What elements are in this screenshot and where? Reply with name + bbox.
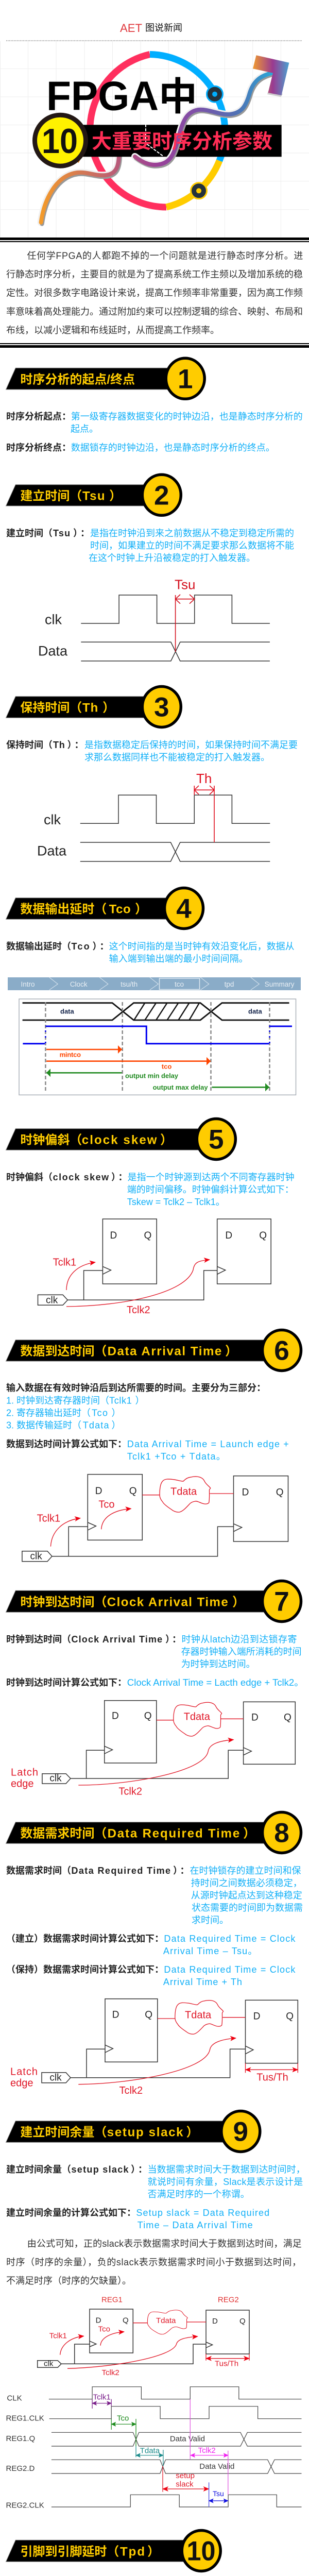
Tdata marker <box>136 2446 163 2466</box>
section 9 text: 当数据需求时间大于数据到达时间时， <box>148 2164 305 2175</box>
setup slack timing chart: REG2.D <box>6 2464 35 2473</box>
section 5 text: 时钟偏斜（ <box>6 1172 53 1182</box>
Tclk2 marker <box>190 2399 228 2495</box>
setup slack circuit: clk <box>44 2360 54 2368</box>
section 5 header: ） <box>160 1133 173 1147</box>
section 10 header: 引脚到引脚延时（ <box>20 2545 119 2558</box>
section 4 text <box>6 941 295 964</box>
section 9 header: setup slack <box>107 2126 184 2139</box>
section 8 text: Arrival Time – Tsu。 <box>163 1946 257 1956</box>
section 6 text: 1. 时钟到达寄存器时间（ <box>6 1395 109 1405</box>
section 6 header: 6 <box>274 1335 289 1366</box>
section 3 header: 保持时间（ <box>20 701 82 715</box>
section 7 header <box>6 1581 301 1622</box>
section 7 text <box>6 1634 304 1688</box>
section 9 text: Time – Data Arrival Time <box>138 2220 253 2230</box>
section 7 text: 为时钟到达时间。 <box>181 1659 255 1669</box>
section 8 text: 求时间。 <box>192 1915 229 1925</box>
intro panel <box>0 238 309 348</box>
section 9 text: ： <box>138 2164 147 2175</box>
section 1 text <box>6 411 303 453</box>
intro panel: 行静态时序分析，主要目的就是为了提高系统工作主频以及增加系统的稳 <box>6 269 303 279</box>
section 9 header: ） <box>186 2126 199 2139</box>
data required circuit: Latch <box>10 2066 38 2077</box>
hold time waveform: Data <box>37 843 67 859</box>
section 10 header: 10 <box>186 2536 215 2566</box>
section 4 text: ： <box>100 941 109 952</box>
intro panel: 率意味着高处理能力。通过附加约束可以控制逻辑的综合、映射、布局和 <box>6 307 303 317</box>
section 9 header <box>6 2111 260 2151</box>
main title: FPGA <box>46 73 159 118</box>
section 4 text: 数据输出延时（ <box>6 941 71 952</box>
section 5 header: clock skew <box>82 1133 158 1147</box>
data required circuit: Tus/Th <box>256 2072 288 2083</box>
clock skew circuit: D <box>225 1230 232 1241</box>
section 6 text: Data Arrival Time = Launch edge + <box>127 1439 289 1449</box>
section 7 header: 时钟到达时间（ <box>20 1595 107 1609</box>
tco nav strip: Intro <box>21 980 35 988</box>
section 3 text: 求那么数据同样也不能被稳定的打入触发器。 <box>84 752 270 762</box>
section 3 text: 保持时间（ <box>6 740 53 750</box>
section 8 text: （建立）数据需求时间计算公式如下： <box>6 1933 164 1944</box>
data required circuit: Tdata <box>185 2010 212 2021</box>
data required circuit: clk <box>49 2072 62 2083</box>
clock skew circuit: D <box>110 1230 117 1241</box>
section 8 text: 数据需求时间（ <box>6 1866 71 1876</box>
section 6 text: Tdata <box>83 1420 110 1430</box>
tco nav strip: tco <box>175 980 184 988</box>
section 2 text: 时间，如果建立的时间不满足要求那么数据将不能 <box>90 540 294 551</box>
setup slack circuit: REG1 <box>101 2295 123 2304</box>
setup slack circuit: Tdata <box>156 2316 176 2325</box>
rising curve, lower part <box>41 149 120 224</box>
section 6 text: ） <box>111 1420 121 1430</box>
section 10 header <box>6 2531 220 2571</box>
section 6 text <box>6 1382 289 1462</box>
section 9 text: 就说时间有余量，Slack是表示设计是 <box>148 2177 303 2187</box>
section 6 text: 输入数据在有效时钟沿后到达所需要的时间。主要分为三部分： <box>6 1382 266 1393</box>
data arrival circuit: clk <box>30 1551 42 1562</box>
section 2 text: 在这个时钟上升沿被稳定的打入触发器。 <box>89 553 255 563</box>
section 7 header: 7 <box>274 1587 289 1617</box>
setup time waveform: clk <box>45 612 62 628</box>
clock skew circuit: Q <box>144 1230 151 1241</box>
Tco marker <box>111 2414 136 2446</box>
setup slack marker: slack <box>176 2480 194 2489</box>
section 7 header: Clock Arrival Time <box>107 1595 229 1609</box>
hold time waveform <box>37 771 270 861</box>
main title: 中 <box>159 75 197 118</box>
section 4 text: 这个时间指的是当时钟有效沿变化后，数据从 <box>109 941 295 952</box>
section 9 text: 由公式可知，正的slack表示数据需求时间大于数据到达时间，满足 <box>27 2239 302 2249</box>
data required circuit: D <box>112 2010 119 2021</box>
section 2 header: Tsu <box>82 489 106 503</box>
section 4 header: ） <box>135 903 147 916</box>
arrow head <box>253 55 289 97</box>
setup slack circuit: Tclk2 <box>102 2368 119 2377</box>
clock arrival circuit: Q <box>284 1712 291 1723</box>
hold time waveform: Th <box>196 771 212 786</box>
section 8 text: Arrival Time + Th <box>163 1977 242 1987</box>
brand header: AET <box>120 22 142 35</box>
setup slack circuit: D <box>212 2317 218 2326</box>
section 6 header: 数据到达时间（ <box>20 1345 107 1358</box>
section 4 text: ） <box>93 941 102 952</box>
section 8 text: Data Required Time <box>71 1866 171 1876</box>
section 5 header: 5 <box>209 1124 224 1155</box>
section 2 text: ） <box>73 528 82 538</box>
tco timing chart: tco <box>162 1062 171 1070</box>
section 2 text: ： <box>80 528 90 538</box>
section 8 text: ） <box>173 1866 182 1876</box>
section 7 text: ） <box>165 1634 175 1645</box>
section 8 text <box>6 1866 303 1987</box>
tco timing chart: mintco <box>60 1051 81 1059</box>
tco timing chart: output max delay <box>153 1083 208 1091</box>
setup slack circuit: REG2 <box>218 2295 239 2304</box>
clock arrival circuit <box>11 1701 295 1797</box>
section 2 header: 2 <box>154 480 169 511</box>
ring graphic <box>90 55 225 207</box>
section 6 text: ） <box>135 1395 144 1405</box>
section 6 text: 数据到达时间计算公式如下： <box>6 1438 127 1449</box>
setup slack timing chart: REG1.Q <box>6 2434 35 2443</box>
tco timing chart: output min delay <box>125 1072 179 1079</box>
setup time waveform: Tsu <box>175 577 195 592</box>
section 7 text: 时钟从latch边沿到达锁存寄 <box>181 1634 297 1645</box>
section 2 text: Tsu <box>53 528 71 538</box>
setup slack circuit: Q <box>239 2317 246 2326</box>
setup slack timing chart: Data Valid <box>170 2435 205 2444</box>
section 5 text: clock skew <box>53 1172 110 1182</box>
section 8 text: （保持）数据需求时间计算公式如下： <box>6 1964 164 1975</box>
hold time waveform: clk <box>44 812 61 827</box>
setup slack timing chart: Data Valid <box>199 2462 234 2471</box>
section 8 header: 数据需求时间（ <box>20 1827 107 1840</box>
section 3 text: ： <box>74 740 83 750</box>
clock arrival circuit: clk <box>49 1773 62 1784</box>
tco nav strip <box>8 977 301 990</box>
section 8 text: Data Required Time = Clock <box>164 1934 296 1944</box>
data arrival circuit: D <box>95 1486 102 1497</box>
section 1 header <box>6 358 204 399</box>
setup slack circuit: Q <box>123 2316 129 2325</box>
section 4 text: Tco <box>71 941 91 952</box>
setup time waveform: Data <box>38 643 68 659</box>
section 5 text: ） <box>111 1172 121 1182</box>
section 6 header: Data Arrival Time <box>108 1345 222 1358</box>
badge 10: 10 <box>42 122 78 161</box>
section 9 text <box>6 2164 305 2286</box>
Tco marker: Tco <box>117 2414 129 2423</box>
section 9 text: Setup slack = Data Required <box>136 2208 269 2218</box>
tco nav strip: Clock <box>70 980 88 988</box>
section 8 text: 在时钟锁存的建立时间和保 <box>190 1866 301 1876</box>
Tsu marker <box>209 2482 228 2507</box>
data required circuit <box>10 1999 298 2096</box>
section 9 text: 不满足时序（时序的欠缺量）。 <box>6 2276 131 2286</box>
data required circuit: D <box>253 2011 261 2022</box>
section 6 text: 3. 数据传输延时（ <box>6 1420 81 1430</box>
hero title graphic <box>0 41 309 238</box>
setup slack circuit: Tus/Th <box>215 2360 238 2368</box>
section 7 text: Clock Arrival Time = Lacth edge + Tclk2。 <box>127 1677 304 1688</box>
setup slack circuit: Tclk1 <box>49 2331 67 2340</box>
section 3 text: ） <box>67 740 76 750</box>
section 8 header <box>6 1812 301 1853</box>
data arrival circuit: Tco <box>98 1499 115 1511</box>
section 4 header: 4 <box>176 893 192 924</box>
subtitle: 大重要时序分析参数 <box>92 131 272 153</box>
section 1 text: 时序分析起点： <box>6 411 71 421</box>
setup slack circuit: Tco <box>98 2325 110 2334</box>
tco timing chart <box>19 999 296 1095</box>
section 7 text: 存器时钟输入端所消耗的时间 <box>181 1647 302 1657</box>
clock skew circuit <box>38 1219 271 1316</box>
clock skew circuit: Q <box>259 1230 267 1241</box>
section 1 text: 第一级寄存器数据变化的时钟边沿，也是静态时序分析的 <box>71 411 303 421</box>
setup slack marker: setup <box>176 2471 195 2480</box>
tco nav strip: Summary <box>265 980 295 988</box>
section 7 text: 时钟到达时间计算公式如下： <box>6 1677 127 1688</box>
section 6 text: ） <box>111 1408 121 1418</box>
section 8 text: Data Required Time = Clock <box>164 1964 296 1975</box>
clock skew circuit: Tclk2 <box>127 1304 150 1316</box>
section 5 text: Tskew = Tclk2 – Tclk1。 <box>127 1197 225 1207</box>
section 10 header: Tpd <box>120 2545 146 2558</box>
data required circuit: edge <box>10 2077 33 2089</box>
setup slack circuit <box>38 2295 249 2377</box>
section 1 text: 数据锁存的时钟边沿，也是静态时序分析的终点。 <box>71 443 275 453</box>
section 8 header: 8 <box>274 1818 289 1849</box>
section 3 text: 是指数据稳定后保持的时间，如果保持时间不满足要 <box>84 740 298 750</box>
section 3 text <box>6 740 298 762</box>
clock arrival circuit: Tclk2 <box>118 1786 142 1797</box>
section 1 text: 起点。 <box>71 423 98 434</box>
section 6 text: Tclk1 <box>109 1395 132 1405</box>
section 6 text: Tco <box>92 1408 109 1418</box>
section 4 header: 数据输出延时（ <box>20 903 107 916</box>
tco timing chart: data <box>60 1008 74 1015</box>
section 6 header: ） <box>225 1345 237 1358</box>
section 3 header: 3 <box>154 692 169 722</box>
tco nav strip: tsu/th <box>121 980 138 988</box>
section 7 text: 时钟到达时间（ <box>6 1634 71 1645</box>
section 1 header: 1 <box>178 364 193 394</box>
data required circuit: Q <box>145 2010 152 2021</box>
clock arrival circuit: D <box>251 1712 259 1723</box>
setup time waveform <box>38 577 270 661</box>
data arrival circuit: Q <box>129 1486 136 1497</box>
data arrival circuit: Q <box>276 1487 284 1498</box>
section 8 text: 状态需要的时间即为数据需 <box>192 1903 303 1913</box>
section 2 text <box>6 528 294 563</box>
section 5 text: 端的时间偏移。时钟偏斜计算公式如下： <box>127 1184 294 1195</box>
section 5 text: ： <box>118 1172 128 1182</box>
section 1 header: 时序分析的起点/终点 <box>20 373 135 386</box>
clock arrival circuit: Tdata <box>184 1711 211 1722</box>
section 4 text: 输入端到输出端的最小时间间隔。 <box>109 954 248 964</box>
section 2 header <box>6 474 181 515</box>
section 9 text: 建立时间余量（ <box>6 2164 71 2175</box>
section 7 text: ： <box>172 1634 181 1645</box>
setup slack timing chart <box>6 2387 302 2510</box>
clock arrival circuit: Q <box>144 1711 151 1722</box>
section 7 text: Clock Arrival Time <box>71 1634 163 1645</box>
section 8 text: ： <box>180 1866 190 1876</box>
section 9 header: 9 <box>233 2116 248 2147</box>
section 5 text <box>6 1172 295 1207</box>
section 9 text: 建立时间余量的计算公式如下： <box>6 2207 136 2218</box>
clock arrival circuit: edge <box>11 1778 34 1789</box>
section 9 text: 否满足时序的一个称谓。 <box>148 2189 250 2199</box>
setup slack timing chart: CLK <box>7 2394 22 2402</box>
section 6 text: 2. 寄存器输出延时（ <box>6 1408 91 1418</box>
intro panel: 布线，以减小逻辑和布线延时，从而提高工作频率。 <box>6 325 219 335</box>
Tsu marker: Tsu <box>213 2489 224 2498</box>
section 2 header: 建立时间（ <box>20 489 82 503</box>
section 8 text: 从源时钟起点达到这种稳定 <box>191 1890 302 1901</box>
Tdata marker: Tdata <box>140 2446 160 2455</box>
setup slack timing chart: REG2.CLK <box>6 2501 44 2510</box>
setup slack circuit: D <box>96 2316 101 2325</box>
Tclk1 marker <box>92 2393 111 2409</box>
clock arrival circuit: D <box>112 1711 119 1722</box>
section 4 header: Tco <box>109 903 131 916</box>
section 4 header <box>6 888 203 928</box>
section 5 header: 时钟偏斜（ <box>20 1133 82 1147</box>
rising curve, upper part <box>135 73 273 166</box>
intro panel: 任何学FPGA的人都跑不掉的一个问题就是进行静态时序分析。进 <box>27 250 303 261</box>
section 9 text: ） <box>131 2164 140 2175</box>
clock skew circuit: clk <box>46 1295 58 1306</box>
data required circuit: Tclk2 <box>119 2085 143 2096</box>
section 8 text: 持时间之间数据必须稳定， <box>191 1878 302 1888</box>
section 2 header: ） <box>109 489 122 503</box>
tco timing chart: data <box>248 1008 263 1015</box>
data required circuit: Q <box>286 2011 294 2022</box>
Tclk1 marker: Tclk1 <box>93 2393 111 2402</box>
section 2 text: 建立时间（ <box>6 528 53 538</box>
section 9 text: setup slack <box>71 2164 129 2175</box>
section 3 header: ） <box>102 701 115 715</box>
section 6 header <box>6 1330 301 1370</box>
Tclk2 marker: Tclk2 <box>198 2446 216 2455</box>
section 9 header: 建立时间余量（ <box>20 2126 107 2139</box>
badge 10 <box>35 115 85 166</box>
setup slack marker <box>163 2466 209 2492</box>
section 8 header: Data Required Time <box>108 1827 241 1840</box>
section 10 header: ） <box>147 2545 160 2558</box>
section 5 header <box>6 1119 235 1159</box>
section 3 header: Th <box>82 701 98 715</box>
section 3 header <box>6 686 181 727</box>
data arrival circuit: D <box>242 1487 249 1498</box>
data arrival circuit: Tclk1 <box>37 1513 60 1524</box>
section 9 text: 时序（时序的余量），负的slack表示数据需求时间小于数据到达时间， <box>6 2257 301 2267</box>
section 3 text: Th <box>53 740 65 750</box>
section 1 text: 时序分析终点： <box>6 442 71 453</box>
data arrival circuit: Tdata <box>170 1486 197 1498</box>
section 6 text: Tclk1 +Tco + Tdata。 <box>127 1451 226 1462</box>
section 2 text: 是指在时钟沿到来之前数据从不稳定到稳定所需的 <box>90 528 294 538</box>
clock skew circuit: Tclk1 <box>53 1257 76 1268</box>
setup slack timing chart: REG1.CLK <box>6 2414 44 2423</box>
brand header: 图说新闻 <box>145 23 182 33</box>
section 5 text: 是指一个时钟源到达两个不同寄存器时钟 <box>128 1172 295 1182</box>
section 7 header: ） <box>232 1595 245 1609</box>
intro panel: 定性。对很多数字电路设计来说，提高工作频率非常重要，因为高工作频 <box>6 287 303 298</box>
tco nav strip: tpd <box>225 980 234 988</box>
clock arrival circuit: Latch <box>11 1767 38 1778</box>
brand header <box>120 22 182 35</box>
data arrival circuit <box>22 1475 288 1562</box>
section 8 header: ） <box>243 1827 255 1840</box>
